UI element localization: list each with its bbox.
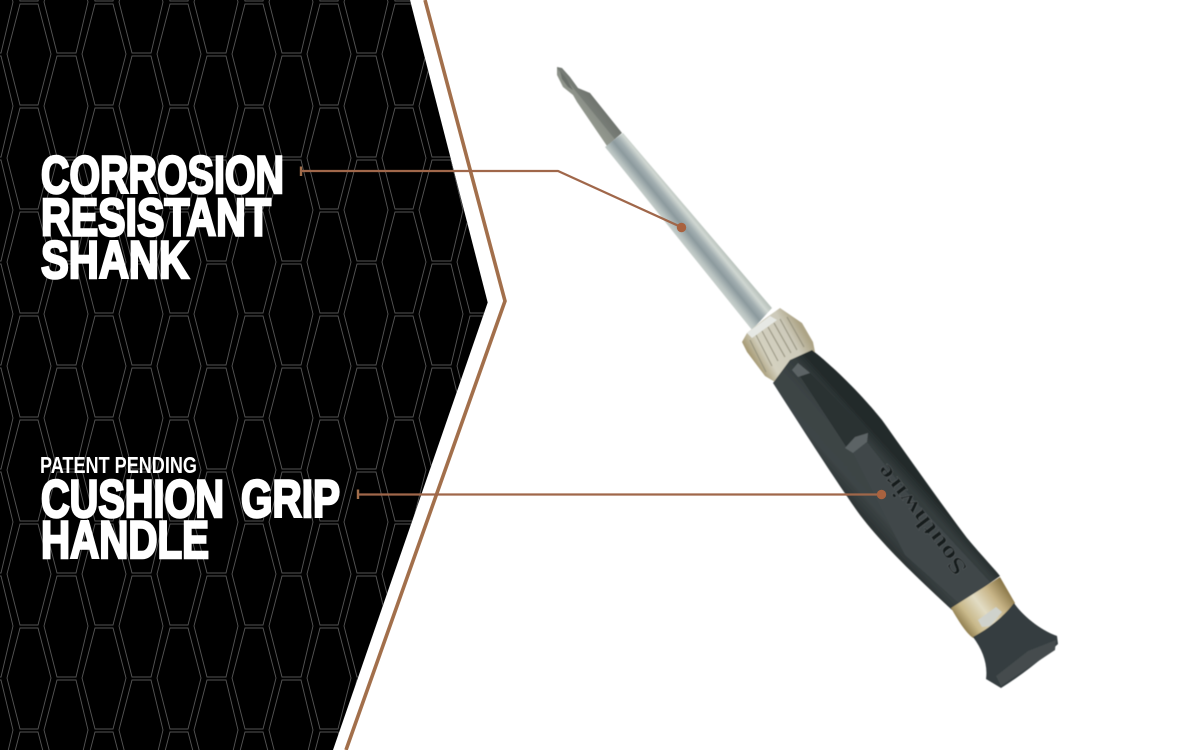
heading: patent pending cushion grip handle: HANDLE [41, 511, 209, 570]
end ring [951, 577, 1015, 638]
handle butt [973, 603, 1058, 688]
callout: shank leader [301, 166, 686, 232]
callout: handle leader [358, 490, 886, 499]
heading: corrosion resistant shank [41, 146, 284, 290]
bit [557, 67, 622, 146]
heading: patent pending cushion grip handle: PATENT PENDING [40, 452, 197, 478]
heading: corrosion resistant shank: SHANK [41, 231, 189, 290]
heading: patent pending cushion grip handle [40, 452, 340, 570]
collar [742, 308, 815, 382]
heading: corrosion resistant shank: RESISTANT [41, 188, 271, 248]
heading: patent pending cushion grip handle: CUSHION [41, 470, 224, 529]
heading: patent pending cushion grip handle: GRIP [241, 470, 340, 529]
shank [605, 133, 772, 330]
screwdriver [557, 67, 1058, 688]
chevron outline [346, 0, 505, 750]
panel: black chevron with hexagon pattern [0, 0, 488, 750]
logo text: Southwire [871, 460, 972, 580]
handle grip [773, 350, 1000, 610]
heading: corrosion resistant shank: CORROSION [41, 146, 284, 205]
